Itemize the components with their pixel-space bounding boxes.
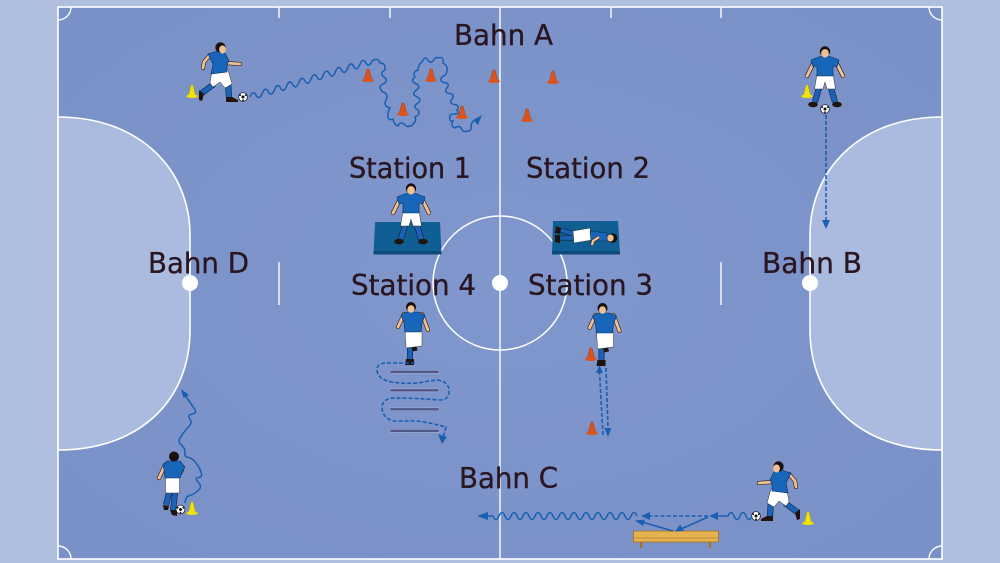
Bahn A cones xyxy=(186,69,559,122)
station 3 dashed paths xyxy=(600,368,608,435)
left penalty area xyxy=(58,117,190,450)
label: Bahn C: Bahn C xyxy=(459,462,558,495)
bench xyxy=(634,531,718,548)
label: Station 4: Station 4 xyxy=(351,269,476,302)
station 2: lying on mat xyxy=(552,221,620,254)
station 4: ladder run xyxy=(377,302,449,444)
Bahn D cone xyxy=(186,502,198,515)
station 1 player xyxy=(393,183,429,244)
Bahn B player xyxy=(807,46,843,107)
station 3: shuttle run xyxy=(585,303,620,437)
station 2 player xyxy=(555,226,617,245)
Bahn C player xyxy=(759,461,800,521)
station 4 arrowhead xyxy=(438,434,447,444)
Bahn C ball xyxy=(752,512,760,520)
Bahn D path xyxy=(179,394,202,503)
label: Station 1: Station 1 xyxy=(349,152,471,185)
station 1: balance on mat xyxy=(374,183,442,254)
right penalty area xyxy=(810,117,942,450)
drill: Bahn A slalom xyxy=(186,42,559,132)
label: Bahn B: Bahn B xyxy=(762,247,862,280)
ladder bars xyxy=(390,370,439,432)
drill: Bahn D dribble xyxy=(159,389,202,516)
Bahn C paths xyxy=(484,512,752,531)
station 3 cones xyxy=(585,348,598,435)
mat 2 xyxy=(552,221,620,254)
centre spots xyxy=(182,275,818,291)
drill: Bahn B pass xyxy=(801,46,843,229)
Bahn D ball xyxy=(176,505,185,514)
Bahn B arrowhead xyxy=(822,220,830,229)
Bahn C cone xyxy=(802,512,814,525)
Bahn D player xyxy=(159,452,185,516)
Bahn B ball xyxy=(821,105,829,113)
Bahn B dashed path xyxy=(825,115,827,222)
Bahn D arrowhead xyxy=(181,389,189,398)
station 3 player xyxy=(590,303,620,366)
Bahn B cone xyxy=(801,85,813,98)
Bahn A dribble path xyxy=(250,57,477,132)
station 4 player xyxy=(398,302,428,365)
station 3 arrowheads xyxy=(596,365,612,437)
mat 1 xyxy=(374,222,442,254)
label: Bahn A: Bahn A xyxy=(454,19,553,52)
Bahn C arrowheads xyxy=(477,512,718,532)
label: Station 2: Station 2 xyxy=(526,152,650,185)
Bahn A arrowhead xyxy=(473,115,482,125)
Bahn A player xyxy=(199,42,240,102)
Bahn A ball xyxy=(239,93,247,101)
centre circle xyxy=(433,216,567,350)
label: Station 3: Station 3 xyxy=(528,269,653,302)
drill: Bahn C bench rebound xyxy=(477,461,814,548)
station 4 dashed path xyxy=(377,363,449,436)
label: Bahn D: Bahn D xyxy=(148,247,249,280)
